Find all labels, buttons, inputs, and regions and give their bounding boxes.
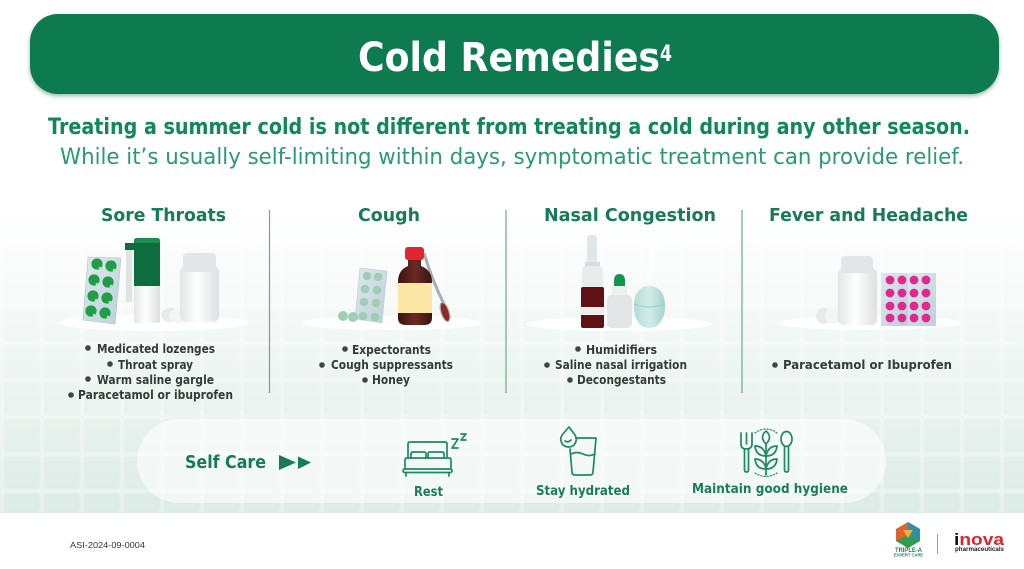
logo: inova pharmaceuticals: pharmaceuticals [955, 547, 1005, 553]
logo: triple-a expert care: TRIPLE-A [895, 548, 923, 554]
logo: inova pharmaceuticals: inova [954, 530, 1005, 549]
heading: Nasal Congestion [544, 205, 716, 226]
bullet list [319, 343, 453, 387]
heading: Sore Throats [101, 205, 226, 226]
title superscript: 4 [660, 42, 672, 67]
panel: fever and headache [769, 205, 968, 372]
panel: sore throats [59, 205, 249, 402]
bullet list [544, 343, 687, 387]
panel: self care [137, 419, 886, 503]
intro text: While it’s usually self-limiting within days, symptomatic treatment can provide relief. [60, 145, 964, 170]
bullet list: Decongestants [577, 373, 666, 387]
logo: triple-a expert care: EXPERT CARE [894, 552, 923, 558]
illustration: tablets, syrup bottle, spoon [300, 247, 482, 330]
column dividers [270, 210, 742, 393]
illustration: nasal spray, dropper, humidifier [526, 235, 712, 331]
bullet list: Warm saline gargle [97, 373, 214, 387]
illustration: bottle and pink tablets [778, 256, 962, 330]
icon: fork, plant, spoon [741, 429, 792, 476]
bullet list [68, 342, 233, 402]
icon: bed [403, 434, 466, 476]
heading: Fever and Headache [769, 205, 968, 226]
bullet list: Expectorants [352, 343, 431, 357]
self care label: Self Care [185, 452, 266, 473]
panel: cough [300, 205, 482, 387]
bullet list: Paracetamol or Ibuprofen [783, 358, 952, 372]
bullet list: Saline nasal irrigation [555, 358, 687, 372]
arrows [279, 455, 311, 470]
illustration: lozenges, throat spray, bottle [59, 238, 249, 331]
stay hydrated label: Stay hydrated [536, 484, 630, 499]
logo divider [936, 534, 938, 554]
panel: nasal congestion [526, 205, 716, 387]
intro text [48, 115, 970, 170]
bullet list: Cough suppressants [331, 358, 453, 372]
title banner [30, 14, 999, 94]
bullet list: Paracetamol or ibuprofen [78, 388, 233, 402]
maintain good hygiene label: Maintain good hygiene [692, 482, 848, 497]
icon: water glass and drop [561, 427, 596, 475]
footer code: ASI-2024-09-0004 [70, 540, 145, 550]
logo: triple-a expert care [894, 522, 923, 558]
rest label: Rest [414, 485, 443, 500]
bullet list: Medicated lozenges [97, 342, 215, 356]
heading: Cough [358, 205, 420, 226]
title: Cold Remedies [358, 35, 660, 81]
bullet list: Humidifiers [586, 343, 657, 357]
bullet list: Honey [372, 373, 410, 387]
bullet list: Throat spray [118, 358, 193, 372]
